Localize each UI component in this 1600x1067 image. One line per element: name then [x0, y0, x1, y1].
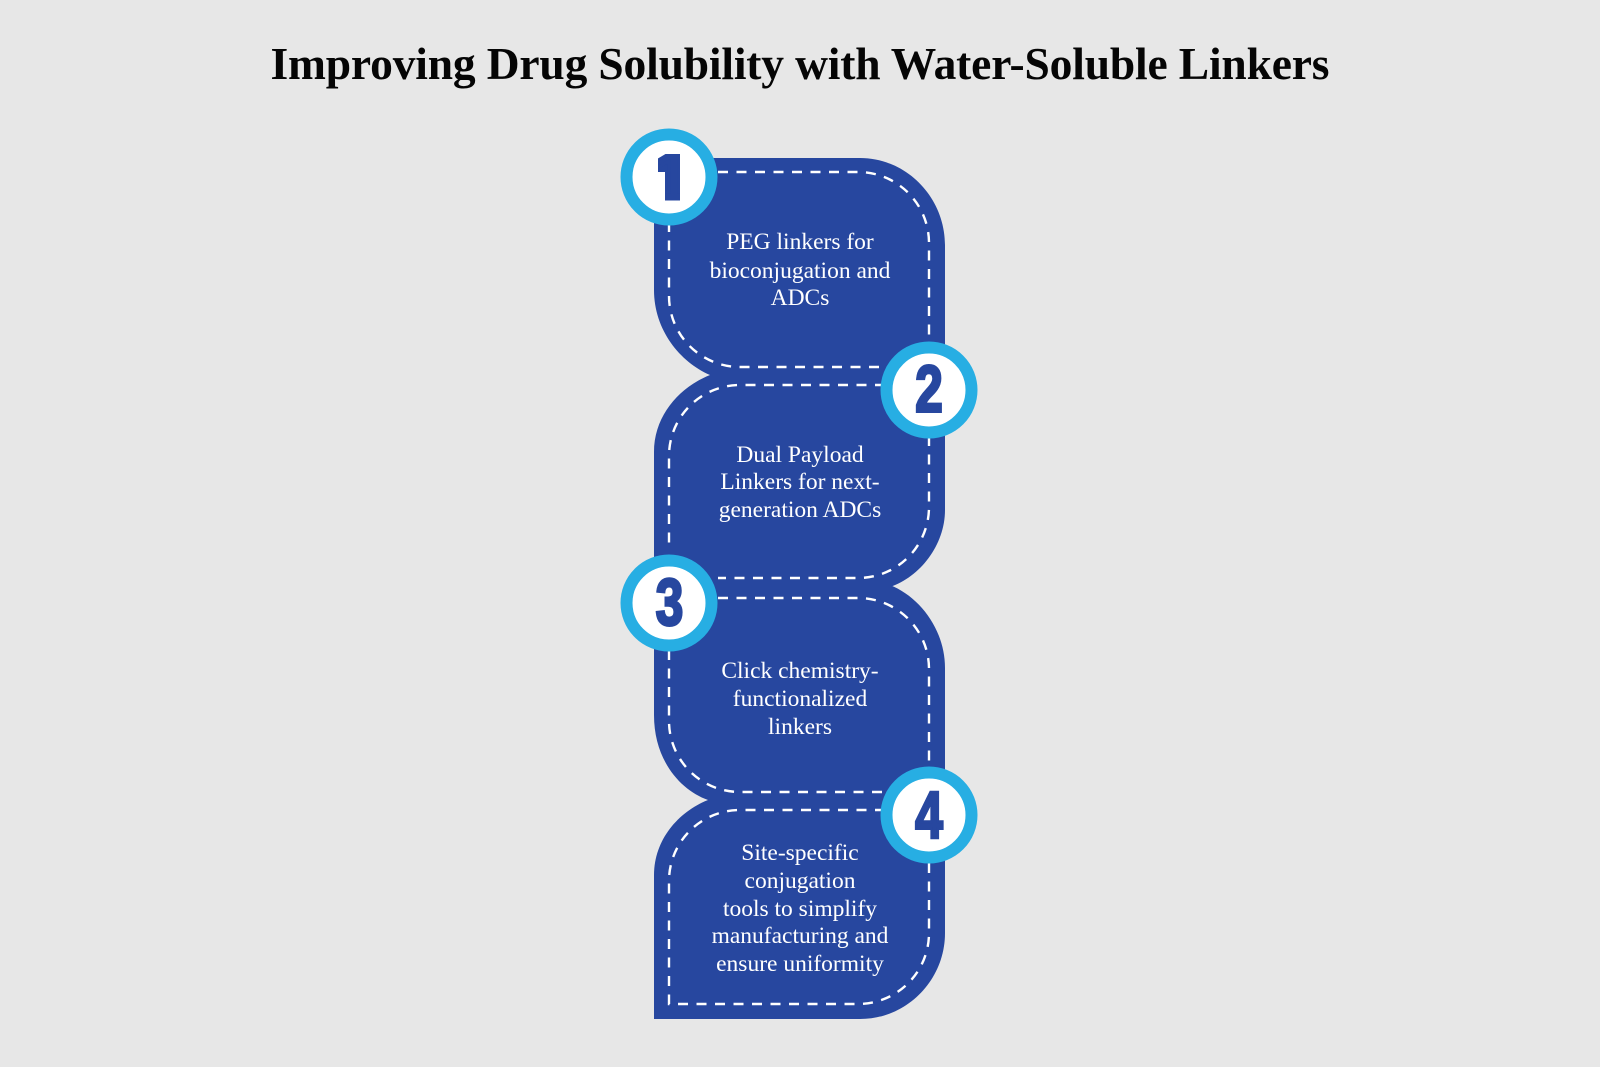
text: step 1: ADCs — [771, 285, 829, 311]
text: step 1: PEG linkers for — [726, 229, 874, 255]
panel: step 2 Dual Payload Linkers — [654, 348, 972, 592]
text: step 4: ensure uniformity — [716, 951, 884, 977]
badge: number 3 — [626, 560, 712, 646]
text: step 4: tools to simplify — [723, 896, 877, 922]
text: step 3: Click chemistry- — [721, 658, 879, 684]
title: Improving Drug Solubility with Water-Soluble Linkers — [270, 38, 1330, 89]
text: step 4: conjugation — [745, 868, 856, 894]
text: step 2: Dual Payload — [736, 442, 864, 468]
panel: step 3 Click chemistry — [626, 560, 945, 805]
badge: number 3: 3 — [656, 566, 683, 640]
text: step 2: Linkers for next- — [720, 469, 880, 495]
text: step 4: manufacturing and — [712, 923, 889, 949]
panel: step 1 PEG linkers — [626, 134, 945, 380]
text: step 4: Site-specific — [741, 840, 859, 866]
text: step 3: linkers — [768, 714, 832, 740]
panel: step 4 Site-specific conjugation — [654, 772, 972, 1019]
badge: number 4 — [886, 772, 972, 858]
badge: number 1: 1 — [652, 139, 692, 213]
badge: number 4: 4 — [915, 779, 943, 852]
text: step 3: functionalized — [733, 686, 867, 712]
text: step 2: generation ADCs — [719, 497, 881, 523]
badge: number 2 — [886, 348, 972, 432]
text: step 1: bioconjugation and — [710, 258, 891, 284]
badge: number 1 — [626, 134, 712, 220]
badge: number 2: 2 — [915, 353, 943, 426]
